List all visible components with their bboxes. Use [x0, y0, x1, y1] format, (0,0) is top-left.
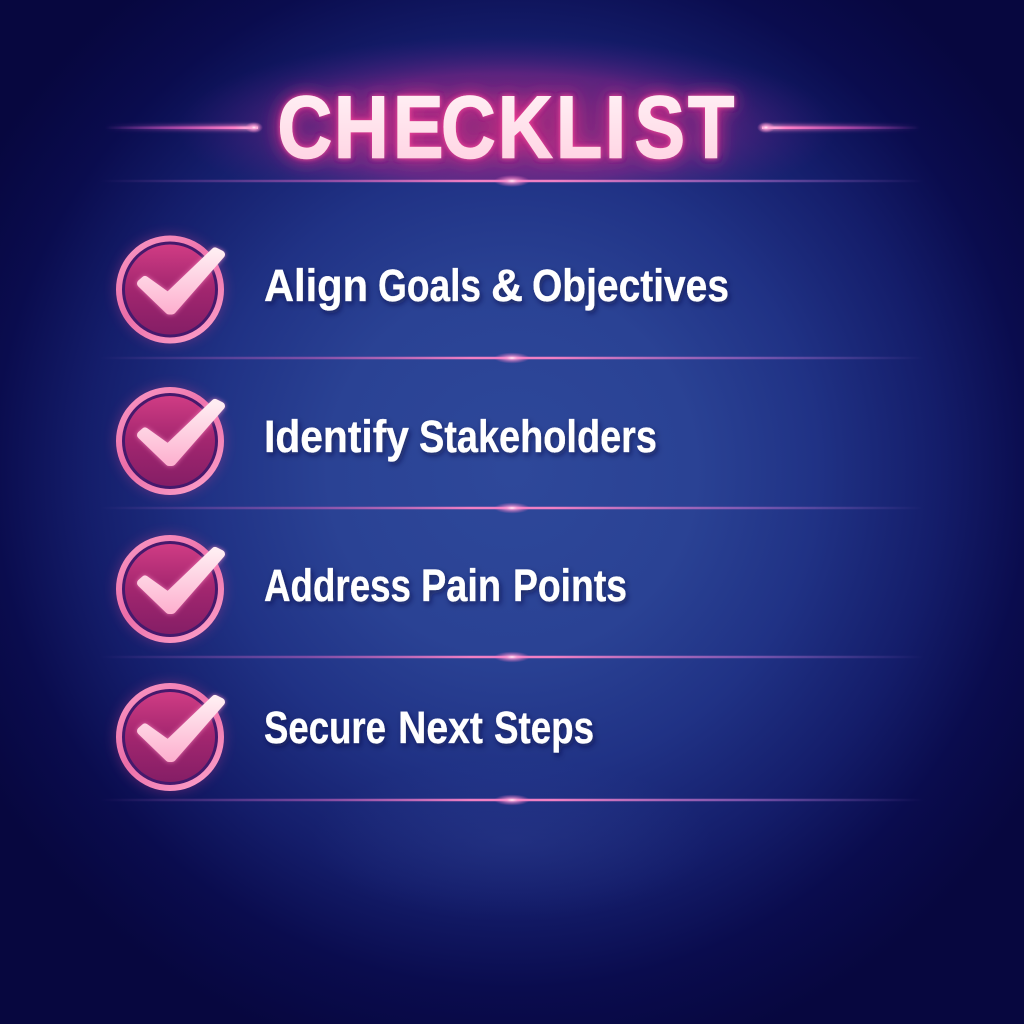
icon: check badge 4 — [115, 682, 225, 792]
lower light pool — [312, 760, 712, 920]
checklist item 4 — [115, 682, 594, 792]
icon: check badge 2 — [115, 386, 225, 496]
divider 4 — [100, 794, 924, 806]
divider 2 — [100, 502, 924, 514]
title divider — [100, 175, 924, 187]
title glow haze — [204, 44, 809, 182]
title text: CHECKLIST — [278, 79, 734, 177]
item 4 label: Next — [398, 702, 483, 753]
item 1 label: Align — [264, 260, 368, 311]
checklist item 2 — [115, 386, 657, 496]
checklist item 3 — [115, 534, 627, 644]
item 3 label: Points — [513, 560, 627, 611]
item 4 label: Steps — [494, 702, 594, 753]
item 2 label: Stakeholders — [419, 411, 657, 462]
left title accent line — [105, 122, 263, 133]
icon: check badge 1 — [115, 234, 225, 344]
item 3 label: Address — [264, 560, 411, 611]
checklist item 1 — [115, 234, 729, 344]
right title accent line — [757, 122, 920, 133]
item 1 label: Objectives — [532, 260, 729, 311]
item 2 label: Identify — [264, 411, 409, 462]
item 4 label: Secure — [264, 702, 386, 753]
title block — [108, 44, 916, 182]
divider 3 — [100, 652, 924, 662]
divider 1 — [100, 352, 924, 364]
icon: check badge 3 — [115, 534, 225, 644]
item 1 label: Goals — [378, 260, 481, 311]
item 3 label: Pain — [421, 560, 501, 611]
item 1 label: & — [491, 260, 523, 311]
